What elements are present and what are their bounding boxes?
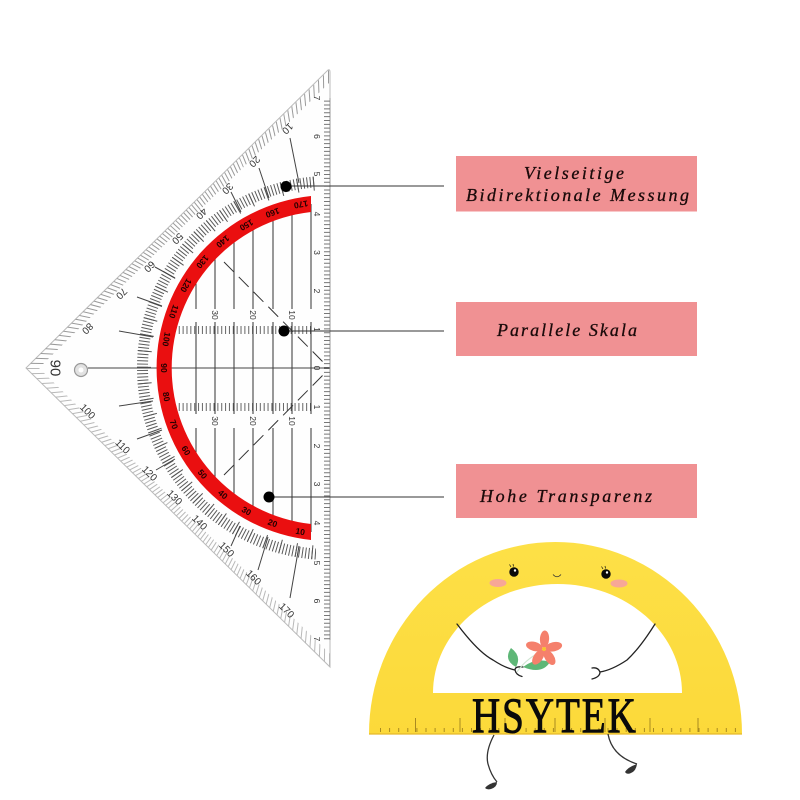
- ruler centimetre numbers: 0: [312, 366, 322, 371]
- ruler centimetre numbers: 5: [312, 172, 322, 177]
- callout line: Parallele Skala: [278, 326, 444, 336]
- callout box: Parallele Skala: [456, 302, 697, 356]
- outer degree labels: 110: [112, 437, 132, 457]
- red arc degree labels: 120: [178, 277, 194, 294]
- callout line: Hohe Transparenz: [264, 492, 444, 502]
- outer degree labels: 40: [193, 205, 209, 221]
- outer degree labels: 30: [219, 180, 235, 196]
- outer degree labels: 120: [139, 464, 159, 484]
- brand name: HSYTEK: [472, 687, 636, 743]
- outer degree labels: [77, 120, 296, 621]
- base edge: [369, 733, 742, 735]
- callout box: Hohe Transparenz: Hohe Transparenz: [479, 486, 652, 506]
- outer degree labels: 20: [246, 153, 262, 169]
- ruler centimetre numbers: 2: [312, 289, 322, 294]
- red arc degree labels: 40: [216, 488, 230, 501]
- red arc degree labels: 110: [167, 303, 181, 320]
- red arc degree labels: [159, 198, 309, 537]
- callout line: Vielseitige: [280, 181, 444, 192]
- callout box: Vielseitige Bidirektionale Messung: [456, 156, 697, 212]
- outer degree labels: 70: [113, 285, 129, 301]
- red arc degree labels: 140: [214, 233, 232, 250]
- outer degree labels: 100: [77, 402, 97, 422]
- parallel scale numbers: [210, 310, 297, 426]
- callout box: Hohe Transparenz: [456, 464, 697, 518]
- ruler centimetre numbers: 2: [312, 444, 322, 449]
- red arc degree labels: 170: [293, 198, 309, 211]
- red arc degree labels: 150: [238, 217, 255, 233]
- red arc degree labels: 130: [194, 253, 211, 271]
- arms: [457, 624, 655, 679]
- parallel scale numbers: 10: [287, 416, 297, 426]
- base ruler ticks: [380, 718, 736, 732]
- pivot hole: [74, 364, 88, 376]
- red arc degree labels: 160: [264, 206, 281, 220]
- red degree arc: [157, 196, 311, 540]
- flower: [508, 630, 563, 672]
- ruler centimetre numbers: [312, 96, 322, 642]
- ruler centimetre numbers: 3: [312, 250, 322, 255]
- ruler centimetre numbers: 4: [312, 212, 322, 217]
- callout box: Vielseitige Bidirektionale Messung: Vielseitige: [524, 163, 624, 183]
- right edge centimetre ruler: [327, 98, 330, 640]
- ruler centimetre numbers: 1: [312, 327, 322, 332]
- outer degree labels: 50: [169, 230, 185, 246]
- red arc degree labels: 60: [179, 444, 193, 457]
- panel: transparent set square: [26, 69, 330, 668]
- ruler centimetre numbers: 7: [312, 637, 322, 642]
- red arc degree labels: 80: [161, 391, 172, 402]
- callout box: Parallele Skala: Parallele Skala: [496, 320, 637, 340]
- ruler centimetre numbers: 6: [312, 134, 322, 139]
- triangle body: [26, 70, 330, 667]
- mascot: yellow protractor: [369, 542, 742, 789]
- ruler centimetre numbers: 4: [312, 521, 322, 526]
- red arc degree labels: 10: [295, 526, 306, 537]
- ruler centimetre numbers: 1: [312, 405, 322, 410]
- big 90 label: 90: [46, 360, 64, 376]
- ruler centimetre numbers: 6: [312, 599, 322, 604]
- outer degree labels: 160: [243, 568, 263, 588]
- callout box: Vielseitige Bidirektionale Messung: Bidirektionale Messung: [466, 185, 689, 205]
- outer degree labels: 140: [189, 513, 209, 533]
- protractor tick ring: [137, 176, 316, 560]
- red arc degree labels: 50: [196, 467, 210, 481]
- parallel scale numbers: 30: [210, 416, 220, 426]
- red arc degree labels: 70: [168, 418, 180, 431]
- outer degree labels: 80: [79, 320, 95, 336]
- parallel scale numbers: 30: [210, 310, 220, 320]
- outer degree labels: 10: [279, 120, 295, 136]
- ruler centimetre numbers: 7: [312, 96, 322, 101]
- red arc degree labels: 30: [240, 504, 253, 518]
- outer degree labels: 60: [141, 258, 157, 274]
- face: [490, 564, 628, 588]
- parallel scale numbers: 10: [287, 310, 297, 320]
- protractor body: [369, 542, 742, 734]
- parallel vertical lines: [196, 204, 311, 532]
- parallel scale numbers: 20: [248, 310, 258, 320]
- ruler centimetre numbers: 3: [312, 482, 322, 487]
- outer degree labels: 170: [276, 601, 296, 621]
- ruler centimetre numbers: 5: [312, 561, 322, 566]
- long ten-degree lines: [119, 138, 299, 598]
- red arc degree labels: 100: [160, 331, 173, 347]
- dashed diagonals: [224, 262, 326, 475]
- centre line: [88, 367, 329, 369]
- outer degree labels: 150: [216, 540, 236, 560]
- legs and feet: [485, 734, 637, 789]
- outer degree labels: 130: [164, 488, 184, 508]
- parallel scale numbers: 20: [248, 416, 258, 426]
- red arc degree labels: 90: [159, 363, 169, 373]
- red arc degree labels: 20: [266, 517, 279, 530]
- parallel scale ticks: [176, 330, 311, 407]
- hypotenuse degree ticks: [26, 70, 330, 666]
